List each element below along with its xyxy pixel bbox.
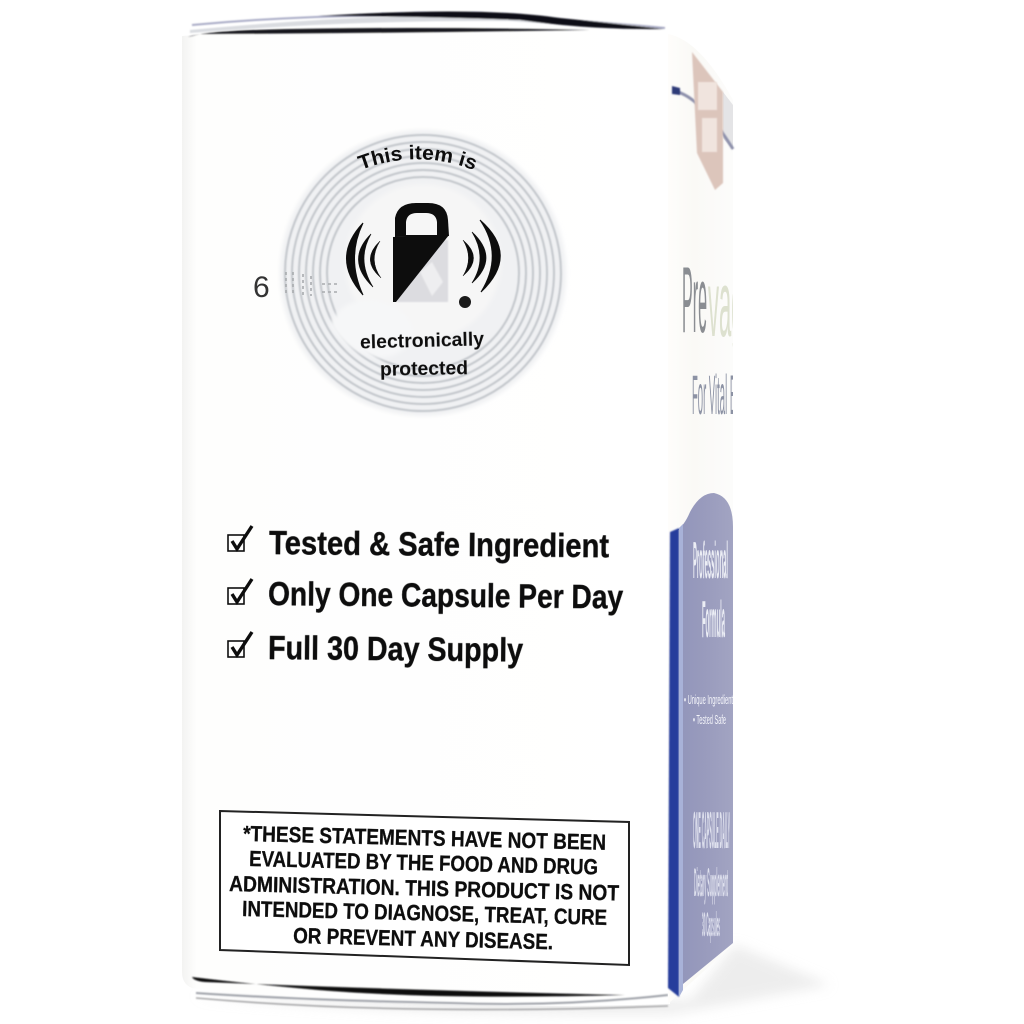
side panel: faded brand name [683, 268, 733, 414]
text: vagen [708, 251, 768, 356]
text: Professional [693, 532, 728, 590]
side panel: blue label: • Tested Safe [693, 712, 726, 727]
disclaimer line 3: ADMINISTRATION. THIS PRODUCT IS NOT [229, 871, 620, 906]
disclaimer line 4: INTENDED TO DIAGNOSE, TREAT, CURE [242, 896, 607, 930]
stray digit 6: 6 [253, 271, 270, 304]
icon: signal waves left [346, 223, 381, 295]
box side panel [666, 45, 735, 998]
benefit text 2: Only One Capsule Per Day [268, 575, 624, 615]
icon: checkbox 3 [228, 632, 252, 657]
side panel: corner badge [692, 52, 723, 190]
icon: padlock [393, 203, 449, 302]
benefit 3 [228, 629, 524, 668]
sticker: text electronically: electronically [360, 329, 485, 354]
benefit text 3: Full 30 Day Supply [268, 629, 524, 668]
side panel: blue accent [672, 86, 680, 95]
sticker: antenna rings [285, 135, 561, 411]
icon: signal waves right [463, 220, 500, 292]
box side panel: • Unique Ingredient [684, 692, 733, 707]
text: Formula [702, 591, 725, 649]
side panel: corner shade [723, 92, 733, 150]
sticker: text top arc: This item is [356, 144, 476, 169]
sticker: chip patch [330, 300, 414, 358]
security sticker [280, 130, 566, 416]
box front panel [182, 25, 670, 1006]
disclaimer line 1: *THESE STATEMENTS HAVE NOT BEEN [243, 821, 606, 855]
text: 30 Capsules [702, 906, 720, 944]
barcode remnant [286, 272, 340, 296]
FDA disclaimer box [220, 811, 629, 965]
icon: checkbox 1 [228, 526, 252, 551]
side panel: badge label [698, 82, 717, 152]
benefit 2 [228, 575, 624, 615]
benefit text 1: Tested & Safe Ingredient [269, 524, 609, 564]
side panel: blue label [668, 493, 733, 997]
benefits checklist [228, 524, 624, 668]
sticker: silver chip [397, 240, 448, 302]
side panel: faded brand name: Pre [682, 247, 707, 352]
side panel: ribbon stripe [674, 91, 733, 149]
box bottom flap edge [192, 977, 668, 1010]
box top flap edge [188, 11, 665, 37]
benefit 1 [228, 524, 609, 564]
disclaimer line 5: OR PREVENT ANY DISEASE. [293, 923, 553, 954]
disclaimer line 2: EVALUATED BY THE FOOD AND DRUG [249, 846, 598, 880]
icon: checkbox 2 [228, 579, 252, 604]
box floor shadow [192, 945, 830, 1014]
sticker: inner disc [345, 184, 501, 340]
icon: signal dot [459, 296, 471, 308]
sticker: text protected: protected [380, 358, 468, 381]
